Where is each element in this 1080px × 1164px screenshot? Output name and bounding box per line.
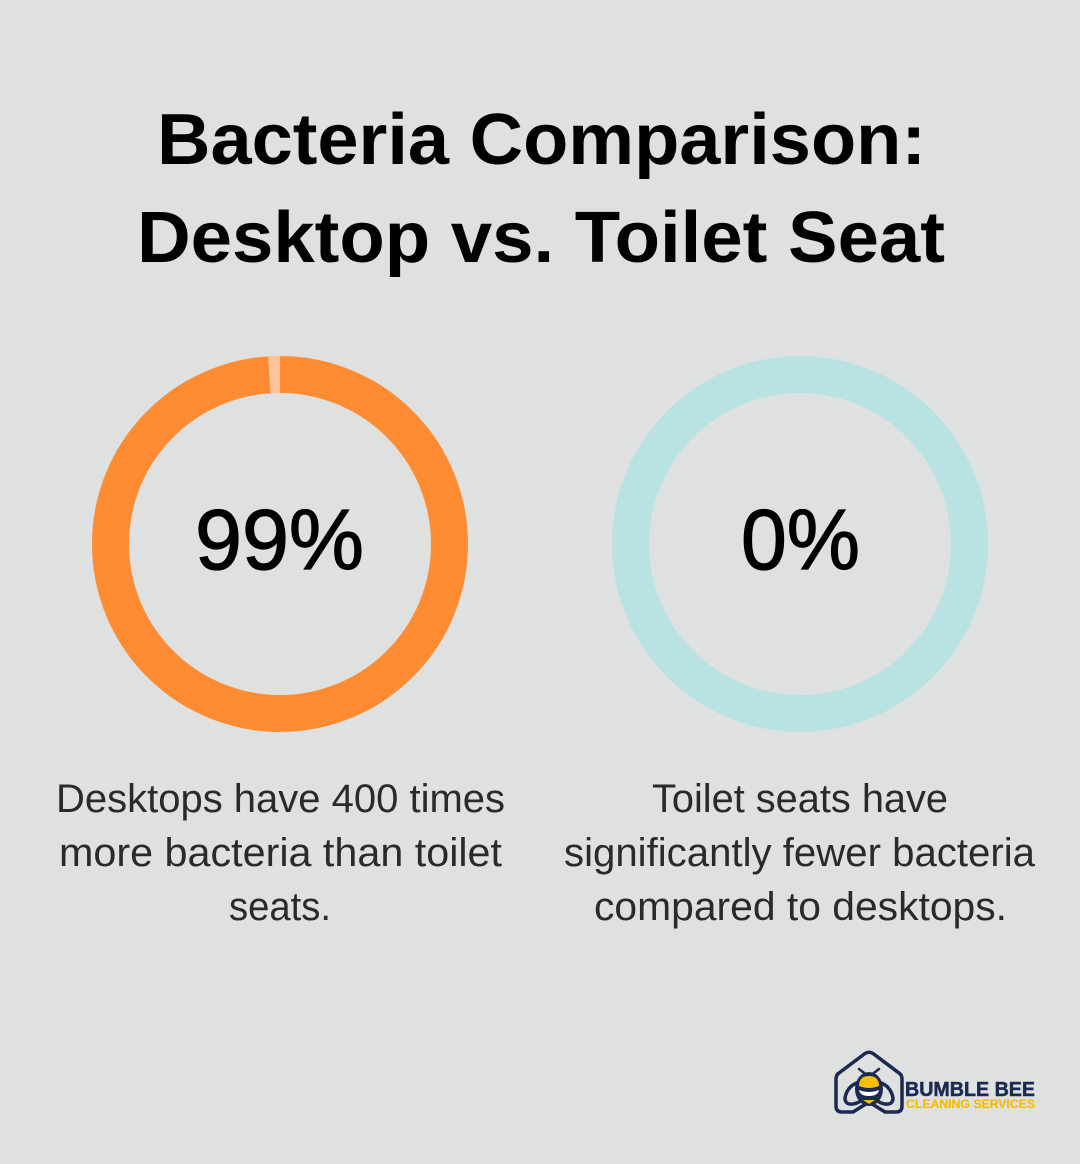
title: Desktop vs. Toilet Seat [137,198,945,278]
description: desktop: more bacteria than toilet [59,831,502,875]
description: desktop: Desktops have 400 times [56,777,505,821]
description: desktop: seats. [229,885,331,929]
panel: toilet seat [564,374,1036,929]
title: Bacteria Comparison: [157,100,926,180]
stat: 0%: 0% [741,493,860,588]
description: toilet seat: Toilet seats have [652,777,948,821]
icon: bee in house [836,1052,902,1112]
donut chart: 99% [110,374,450,714]
logo tagline: CLEANING SERVICES [906,1097,1035,1111]
logo: Bumble Bee Cleaning Services [836,1052,1035,1112]
logo wordmark: BUMBLE BEE [905,1079,1035,1101]
description: toilet seat [564,777,1036,929]
donut chart: 0% [630,374,970,714]
description: desktop [56,777,505,929]
panel: desktop [56,374,505,929]
description: toilet seat: significantly fewer bacteria [564,831,1036,875]
description: toilet seat: compared to desktops. [594,885,1007,929]
stat: 99%: 99% [195,493,364,588]
title [137,100,945,278]
